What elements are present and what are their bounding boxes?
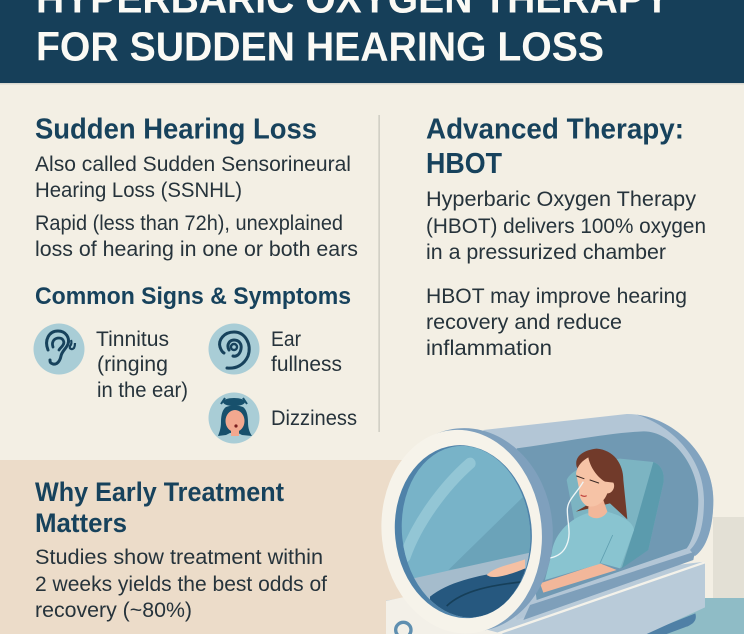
text block: early treatment: Studies show treatment within xyxy=(35,546,323,569)
text block: hbot benefits xyxy=(426,285,687,360)
text: ear fullness: fullness xyxy=(271,353,342,376)
chamber shell xyxy=(483,414,713,620)
neck and face xyxy=(588,500,607,518)
title: FOR SUDDEN HEARING LOSS xyxy=(36,24,604,70)
text: tinnitus: (ringing xyxy=(97,353,168,376)
text block: definition: Also called Sudden Sensorineural xyxy=(35,153,351,176)
heading: why early treatment: Why Early Treatment xyxy=(35,477,284,507)
text block: early treatment xyxy=(35,546,327,622)
torso xyxy=(545,512,634,580)
text: tinnitus: in the ear) xyxy=(97,379,188,402)
panel: why early treatment matters xyxy=(0,460,420,634)
text block: hbot description: (HBOT) delivers 100% oxygen xyxy=(426,215,706,238)
panel: advanced therapy xyxy=(426,114,706,360)
text block: definition xyxy=(35,153,358,261)
text block: hbot description: in a pressurized chamber xyxy=(426,241,666,264)
door glass xyxy=(402,446,530,618)
text block: hbot benefits: inflammation xyxy=(426,337,552,360)
title xyxy=(36,0,670,70)
heading: sudden hearing loss: Sudden Hearing Loss xyxy=(35,114,317,146)
header banner xyxy=(0,0,744,84)
panel: signs and symptoms xyxy=(34,283,357,444)
text: dizziness: Dizziness xyxy=(271,407,357,430)
text: tinnitus xyxy=(96,328,188,402)
text block: early treatment: 2 weeks yields the best odds of xyxy=(35,573,327,596)
heading: advanced therapy hbot xyxy=(426,114,684,180)
text block: hbot description xyxy=(426,188,706,264)
text: ear fullness xyxy=(271,328,342,376)
icon: ear fullness spiral xyxy=(208,324,260,374)
heading: advanced therapy hbot: HBOT xyxy=(426,148,502,180)
icon: ear with ringing xyxy=(34,324,84,374)
patient xyxy=(540,449,634,593)
text block: hbot benefits: recovery and reduce xyxy=(426,311,622,334)
oxygen tube xyxy=(550,482,583,558)
arm xyxy=(540,563,617,593)
text block: definition: loss of hearing in one or both ears xyxy=(35,238,358,261)
text: ear fullness: Ear xyxy=(271,328,301,351)
illustration: hyperbaric chamber with patient xyxy=(371,414,713,634)
text block: definition: Rapid (less than 72h), unexplained xyxy=(35,212,343,235)
door ring xyxy=(371,420,563,634)
text: tinnitus: Tinnitus xyxy=(96,328,169,351)
chamber base xyxy=(386,562,705,634)
hair xyxy=(576,449,627,519)
text block: definition: Hearing Loss (SSNHL) xyxy=(35,179,242,202)
text block: early treatment: recovery (~80%) xyxy=(35,599,192,622)
heading: advanced therapy hbot: Advanced Therapy: xyxy=(426,114,684,146)
heading: common signs and symptoms: Common Signs & Symptoms xyxy=(35,283,351,310)
heading: why early treatment xyxy=(35,477,284,538)
panel: sudden hearing loss xyxy=(35,114,358,261)
heading: why early treatment: Matters xyxy=(35,508,127,538)
text block: hbot benefits: HBOT may improve hearing xyxy=(426,285,687,308)
text block: hbot description: Hyperbaric Oxygen Therapy xyxy=(426,188,697,211)
pillow xyxy=(567,459,664,568)
icon: dizziness face xyxy=(208,392,260,444)
